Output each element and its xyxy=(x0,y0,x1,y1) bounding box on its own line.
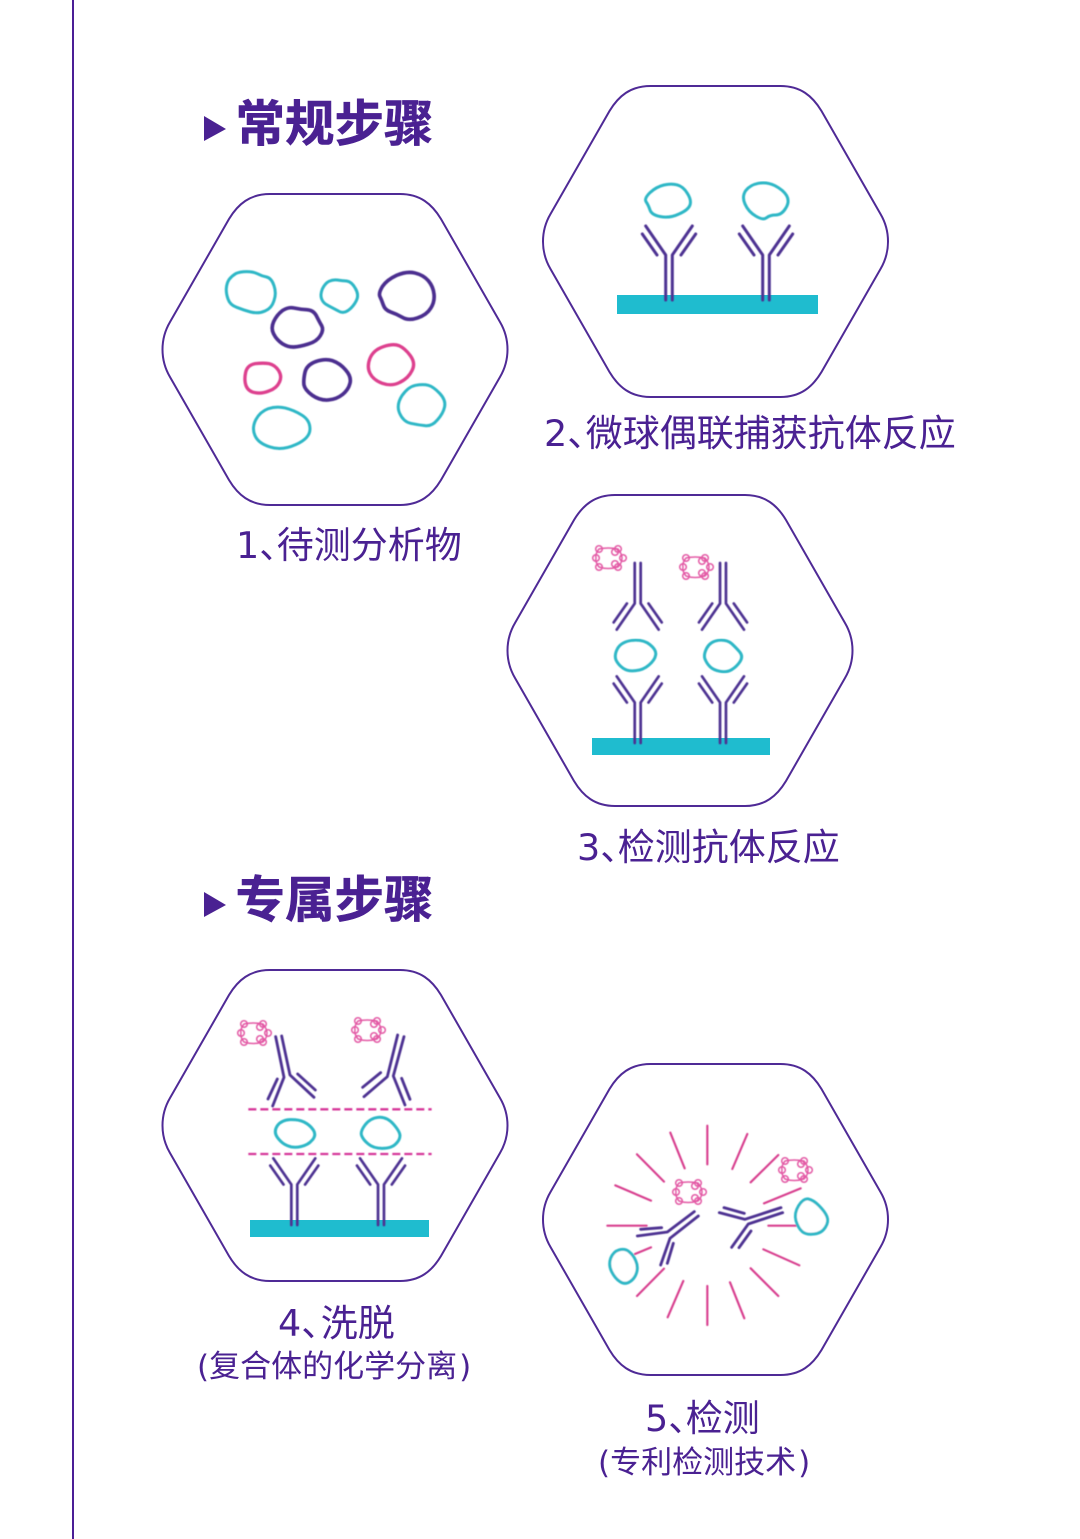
panel: step 2 bead coupling xyxy=(543,86,888,397)
hexagon outline 3 xyxy=(508,495,852,806)
analyte blobs xyxy=(226,272,445,449)
hexagon outline 4 xyxy=(162,970,508,1281)
caption: step 2: 2、微球偶联捕获抗体反应 xyxy=(544,412,956,455)
heading: 专属步骤: 专属步骤 xyxy=(236,861,434,932)
panel: step 4 elution xyxy=(162,970,508,1281)
detection molecules xyxy=(238,1018,385,1045)
caption: step 5: (专利检测技术) xyxy=(598,1445,810,1481)
caption: step 5 xyxy=(598,1397,810,1481)
caption: step 4: (复合体的化学分离) xyxy=(197,1349,471,1385)
caption: step 1: 1、待测分析物 xyxy=(236,524,462,567)
teal bar xyxy=(592,738,770,755)
analyte blobs xyxy=(646,183,788,219)
panel: step 5 detection xyxy=(543,1064,888,1375)
analyte blobs xyxy=(615,640,742,672)
heading: 常规步骤: 常规步骤 xyxy=(236,85,434,156)
panel: step 3 detection antibody xyxy=(508,495,852,806)
hexagon outline 2 xyxy=(543,86,888,397)
caption: step 3: 3、检测抗体反应 xyxy=(577,826,840,869)
panel: step 1 analytes xyxy=(162,194,508,505)
teal bar xyxy=(250,1220,429,1237)
detection molecules xyxy=(673,1158,812,1204)
antibodies xyxy=(614,563,747,743)
caption: step 4: 4、洗脱 xyxy=(278,1302,395,1345)
hexagon outline 5 xyxy=(543,1064,888,1375)
detection molecules xyxy=(593,546,713,579)
released antibodies, dashed lines, blobs xyxy=(248,1035,432,1154)
caption: step 5: 5、检测 xyxy=(645,1397,760,1440)
signal rays, antibodies, blobs xyxy=(607,1126,828,1325)
vertical rule xyxy=(72,0,74,1539)
caption: step 4 xyxy=(197,1302,471,1385)
teal bar xyxy=(617,295,818,314)
hexagon outline 1 xyxy=(162,194,508,505)
bottom antibodies xyxy=(270,1158,405,1225)
capture antibodies xyxy=(642,226,793,300)
